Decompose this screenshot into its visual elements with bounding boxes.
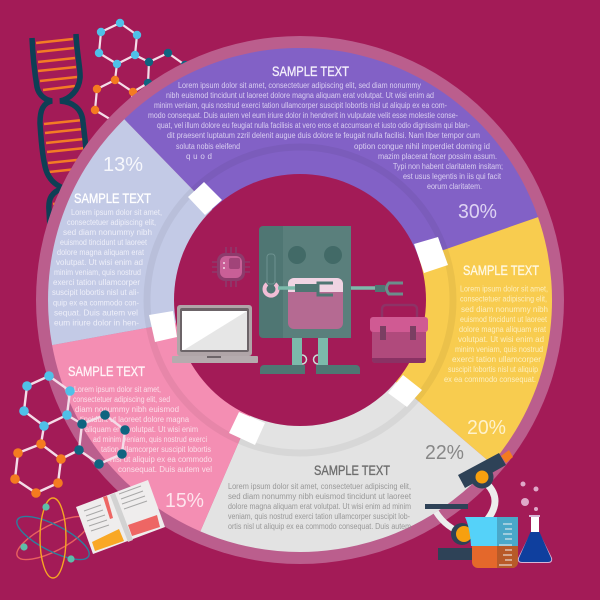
white connector blocks bbox=[149, 182, 448, 445]
text block: purple: mazim placerat facer possim assum. bbox=[378, 152, 497, 161]
text block: purple bbox=[148, 81, 503, 191]
percent: 13%: 13% bbox=[103, 154, 143, 176]
text block: yellow: Lorem ipsum dolor sit amet, bbox=[460, 284, 548, 294]
text block: purple: minim veniam, quis nostrud exerci tation ullamcorper suscipit lobortis nisl ut aliquip ex ea com- bbox=[154, 101, 447, 110]
text block: lavender: euismod tincidunt ut laoreet bbox=[60, 238, 148, 247]
text block: pink: consectetuer adipiscing elit, sed bbox=[73, 395, 170, 404]
heading: pink: SAMPLE TEXT bbox=[68, 364, 145, 379]
text block: pink bbox=[73, 385, 213, 474]
text block: lavender: volutpat. Ut wisi enim ad bbox=[56, 258, 143, 267]
text block: lavender: exerci tation ullamcorper bbox=[53, 278, 140, 287]
centre hole bbox=[174, 174, 426, 426]
heading: purple: SAMPLE TEXT bbox=[272, 64, 349, 79]
text block: yellow: sed diam nonummy nibh bbox=[461, 305, 548, 314]
text block: grey: veniam, quis nostrud exerci tation ullamcorper suscipit lob- bbox=[228, 512, 410, 521]
text block: lavender: dolore magna aliquam erat bbox=[57, 248, 145, 257]
text block: grey: Lorem ipsum dolor sit amet, consectetuer adipiscing elit, bbox=[228, 482, 411, 491]
text block: yellow: euismod tincidunt ut laoreet bbox=[460, 315, 548, 324]
text block: lavender: Lorem ipsum dolor sit amet, bbox=[71, 208, 162, 217]
icon: atom bbox=[11, 498, 95, 578]
text block: yellow: dolore magna aliquam erat bbox=[459, 325, 547, 334]
heading: grey: SAMPLE TEXT bbox=[314, 463, 390, 478]
text block: pink: consequat. Duis autem vel bbox=[118, 465, 212, 474]
icon: flask bbox=[518, 482, 552, 563]
text block: purple: nibh euismod tincidunt ut laoreet dolore magna aliquam erat volutpat. Ut wisi enim ad bbox=[166, 91, 434, 100]
text block: lavender: suscipit lobortis nisl ut ali- bbox=[52, 288, 139, 297]
robot body bbox=[259, 226, 283, 338]
text block: purple: est usus legentis in iis qui facit bbox=[403, 172, 502, 181]
panel: lavender segment 13% bbox=[48, 119, 300, 345]
panel: grey segment 22% bbox=[200, 300, 492, 552]
text block: yellow: minim veniam, quis nostrud bbox=[455, 345, 543, 354]
icon: laptop bbox=[172, 305, 258, 363]
heading: yellow: SAMPLE TEXT bbox=[463, 263, 539, 278]
text block: lavender: quip ex ea commodo con- bbox=[53, 298, 139, 308]
text block: purple: quod bbox=[186, 152, 212, 161]
icon: DNA helix bbox=[32, 34, 87, 256]
panel: purple segment 30% bbox=[124, 48, 538, 300]
text block: pink: aliquam erat volutpat. Ut wisi enim bbox=[85, 425, 198, 434]
percent: 22%: 22% bbox=[425, 442, 464, 464]
text block: lavender bbox=[52, 208, 162, 328]
text block: purple: quat, vel illum dolore eu feugiat nulla facilisis at vero eros et accumsan et iusto odio dignissim qui blan- bbox=[157, 121, 470, 130]
text block: yellow: volutpat. Ut wisi enim ad bbox=[458, 335, 544, 344]
text block: purple: Lorem ipsum dolor sit amet, consectetuer adipiscing elit, sed diam nonummy bbox=[178, 81, 421, 90]
text block: purple: eorum claritatem. bbox=[427, 182, 482, 191]
robot knees bbox=[302, 355, 318, 364]
text block: lavender: eum iriure dolor in hen- bbox=[54, 318, 139, 328]
robot legs bbox=[292, 338, 328, 365]
percent: 15%: 15% bbox=[165, 490, 204, 512]
percent: 20%: 20% bbox=[467, 417, 506, 439]
percent: 30%: 30% bbox=[458, 201, 497, 223]
robot feet bbox=[260, 365, 360, 374]
text block: yellow: exerci tation ullamcorper bbox=[452, 355, 541, 364]
text block: pink: tation ullamcorper suscipit lobortis bbox=[101, 445, 211, 454]
robot eyes bbox=[288, 246, 342, 264]
icon: top molecule bbox=[91, 19, 189, 125]
text block: lavender: consectetuer adipiscing elit, bbox=[67, 218, 156, 227]
icon: lower molecule bbox=[10, 371, 130, 498]
text block: lavender: minim veniam, quis nostrud bbox=[54, 268, 141, 277]
text block: yellow: consectetuer adipiscing elit, bbox=[460, 294, 547, 304]
text block: purple: modo consequat. Duis autem vel eum iriure dolor in hendrerit in vulputate velit esse molestie conse- bbox=[148, 111, 458, 120]
robot arms bbox=[278, 286, 383, 290]
text block: purple: soluta nobis eleifend bbox=[176, 142, 240, 151]
text block: purple: option congue nihil imperdiet doming id bbox=[354, 142, 490, 151]
icon: chip bbox=[212, 247, 250, 287]
robot screen bbox=[288, 278, 343, 329]
text block: grey: ortis nisl ut aliquip ex ea commodo consequat. Duis autem bbox=[228, 522, 411, 531]
icon: microscope bbox=[425, 450, 513, 560]
text block: yellow: suscipit lobortis nisl ut aliquip bbox=[448, 365, 538, 374]
text block: lavender: sed diam nonummy nibh bbox=[63, 228, 152, 237]
panel: yellow segment 20% bbox=[300, 217, 552, 464]
outer ring bbox=[36, 36, 564, 564]
text block: lavender: sequat. Duis autem vel bbox=[54, 308, 138, 318]
icon: robot bbox=[259, 226, 403, 374]
text block: pink: tincidunt ut laoreet dolore magna bbox=[80, 415, 190, 424]
icon: beaker bbox=[465, 517, 518, 568]
text block: grey: dolore magna aliquam erat volutpat. Ut wisi enim ad minim bbox=[228, 502, 411, 511]
text block: pink: ad minim veniam, quis nostrud exerci bbox=[93, 435, 207, 444]
heading: lavender: SAMPLE TEXT bbox=[74, 191, 151, 206]
icon: toolbox bbox=[370, 305, 428, 363]
text block: grey bbox=[228, 482, 412, 531]
robot thermometer bbox=[267, 254, 275, 284]
text block: grey: sed diam nonummy nibh euismod tincidunt ut laoreet bbox=[228, 492, 412, 501]
text block: purple: dit praesent luptatum zzril delenit augue duis dolore te feugait nulla facilisi. Nam liber tempor cum bbox=[167, 131, 480, 140]
text block: yellow: ex ea commodo consequat. bbox=[444, 375, 536, 384]
text block: pink: nisl ut aliquip ex ea commodo bbox=[110, 455, 213, 464]
text block: yellow bbox=[444, 284, 548, 384]
text block: pink: diam nonummy nibh euismod bbox=[75, 405, 179, 414]
text block: purple: Typi non habent claritatem insitam; bbox=[393, 162, 503, 171]
text block: pink: Lorem ipsum dolor sit amet, bbox=[74, 385, 161, 394]
panel: pink segment 15% bbox=[52, 300, 300, 531]
icon: open book bbox=[76, 480, 165, 554]
